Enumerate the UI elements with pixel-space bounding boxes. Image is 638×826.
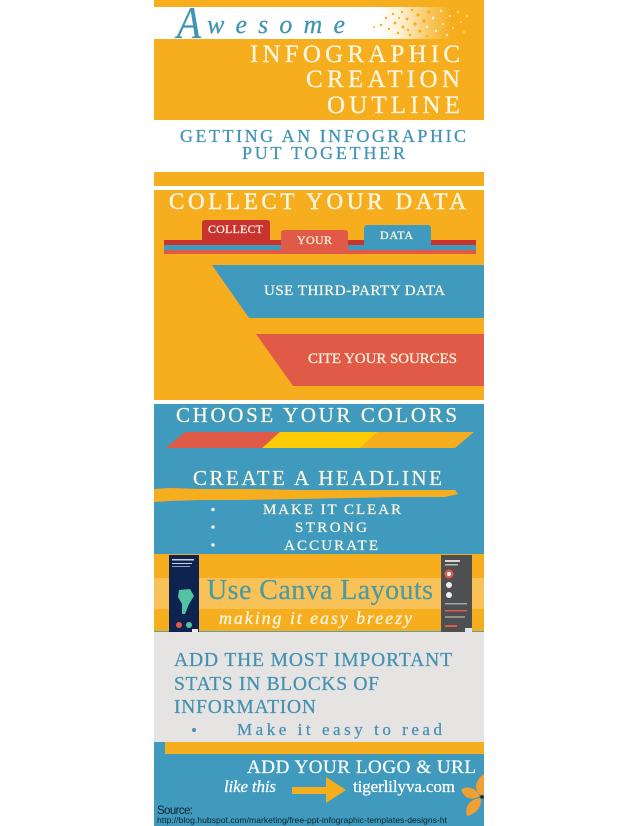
heading: Infographic Creation Outline: CREATION xyxy=(306,66,460,93)
heading: Infographic Creation Outline: OUTLINE xyxy=(327,92,460,119)
tab: your: YOUR xyxy=(297,233,332,247)
heading: add important stats: STATS IN BLOCKS OF xyxy=(174,674,379,695)
heading: add important stats: INFORMATION xyxy=(174,697,316,718)
panel: stats xyxy=(154,632,484,742)
orange divider band xyxy=(154,172,484,186)
thumbnail: right template xyxy=(441,555,472,632)
tagline: making it easy breezy xyxy=(219,608,412,628)
color swatches xyxy=(166,432,474,448)
panel: logo and url xyxy=(154,742,484,826)
subtitle: GETTING AN INFOGRAPHIC xyxy=(180,126,466,146)
source credit xyxy=(157,805,448,825)
heading: Infographic Creation Outline: INFOGRAPHIC xyxy=(250,41,460,68)
thumbnail: left template xyxy=(169,555,199,632)
bullet list: MAKE IT CLEAR xyxy=(263,502,401,518)
subtitle: PUT TOGETHER xyxy=(242,143,405,163)
tab: collect: COLLECT xyxy=(208,222,264,236)
icon: flower logo xyxy=(461,774,484,816)
heading: use canva layouts: Use Canva Layouts xyxy=(207,575,433,606)
arrow xyxy=(292,777,346,803)
heading: Infographic Creation Outline xyxy=(250,41,460,119)
panel: canva layouts xyxy=(154,554,484,632)
heading: add your logo: ADD YOUR LOGO & URL xyxy=(247,757,476,778)
heading: choose your colors: CHOOSE YOUR COLORS xyxy=(176,403,457,427)
bullet list xyxy=(211,502,401,554)
panel: collect your data xyxy=(154,189,484,400)
heading: collect your data: COLLECT YOUR DATA xyxy=(169,189,466,214)
banner: use third-party data xyxy=(212,265,484,318)
heading: create a headline: CREATE A HEADLINE xyxy=(193,466,442,490)
tab: your xyxy=(281,230,348,254)
tab bars xyxy=(164,220,476,254)
script: like this: like this xyxy=(224,777,276,796)
source credit: Source: xyxy=(157,805,193,817)
heading: add important stats: ADD THE MOST IMPORTANT xyxy=(174,650,452,671)
panel: colors and headline xyxy=(154,403,484,554)
tab: data xyxy=(364,225,431,250)
source credit: http://blog.hubspot.com/marketing/free-ppt-infographic-templates-designs-ht xyxy=(157,815,448,825)
tab: collect xyxy=(202,220,270,242)
panel: title header xyxy=(154,0,484,120)
bullet list: ACCURATE xyxy=(284,538,378,554)
tab: data: DATA xyxy=(380,228,413,242)
banner: cite your sources: CITE YOUR SOURCES xyxy=(308,351,457,367)
bullet: make it easy to read: Make it easy to read xyxy=(237,720,442,739)
url: tigerlilyva.com xyxy=(353,777,455,796)
banner: cite your sources xyxy=(256,334,484,386)
subtitle xyxy=(180,126,466,163)
heading: Awesome: wesome xyxy=(207,10,345,39)
banner: use third-party data: USE THIRD-PARTY DATA xyxy=(264,283,445,299)
bullet list: STRONG xyxy=(295,520,367,536)
heading: add important stats xyxy=(174,650,452,718)
brush stroke xyxy=(154,488,458,502)
